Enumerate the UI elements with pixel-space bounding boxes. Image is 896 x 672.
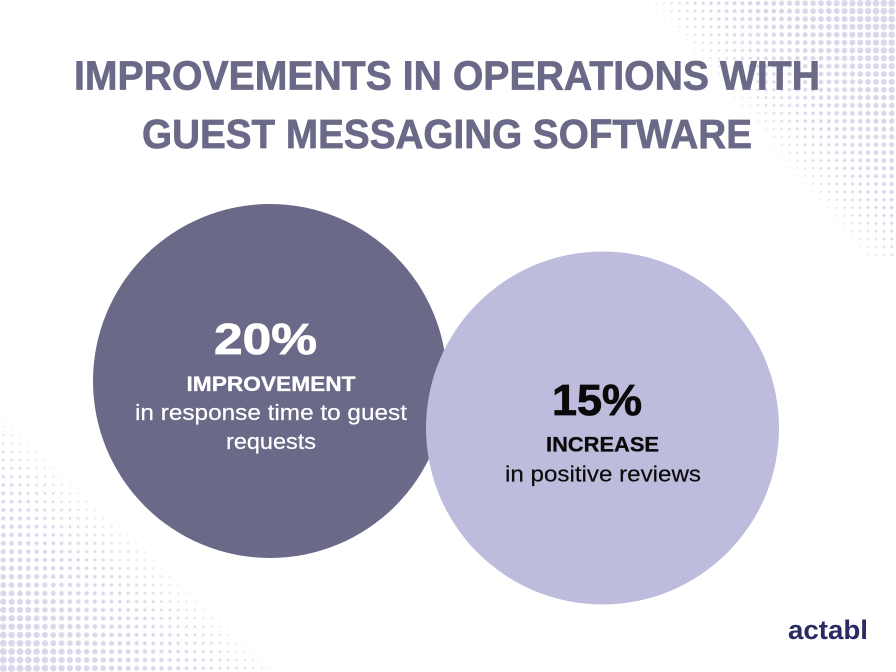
- stat: 15%: 15%: [552, 376, 642, 425]
- description: response time: requests: [226, 429, 316, 454]
- logo: actabl: actabl: [788, 615, 868, 645]
- title: IMPROVEMENTS IN OPERATIONS WITH: [74, 52, 820, 98]
- label: improvement: IMPROVEMENT: [186, 373, 356, 396]
- label: increase: INCREASE: [546, 434, 659, 456]
- stat: 20%: 20%: [214, 315, 317, 364]
- title: GUEST MESSAGING SOFTWARE: [142, 111, 752, 157]
- panel: 20% improvement circle: [93, 204, 447, 558]
- halftone dots: bottom left: [0, 402, 278, 672]
- title: [74, 52, 820, 157]
- dark circle: [93, 204, 447, 558]
- description: positive reviews: in positive reviews: [505, 462, 701, 486]
- halftone dots: top right: [648, 0, 896, 256]
- description: response time: [135, 400, 407, 454]
- description: response time: in response time to guest: [135, 400, 407, 425]
- light circle: [426, 252, 779, 604]
- panel: 15% increase circle: [426, 252, 779, 604]
